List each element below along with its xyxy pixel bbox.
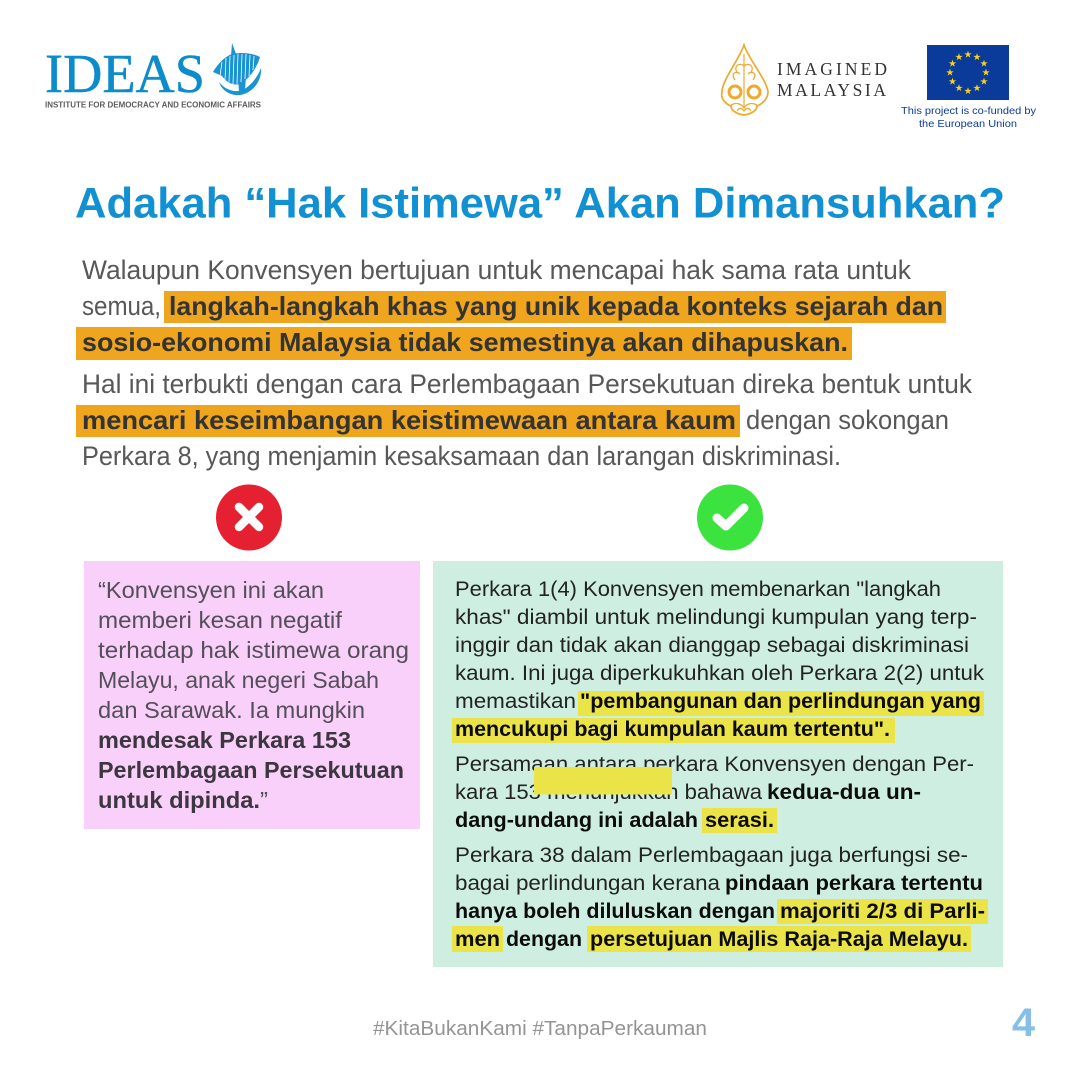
paragraph: Perkara 1(4): Perkara 1(4) Konvensyen membenarkan "langkah — [455, 577, 941, 601]
logo: Imagined Malaysia: MALAYSIA — [777, 80, 886, 100]
paragraph: Perkara 38: hanya boleh diluluskan dengan — [455, 899, 775, 923]
EU credit text: the European Union — [919, 118, 1017, 130]
panel: facts — [433, 561, 1003, 967]
title: Adakah “Hak Istimewa” Akan Dimansuhkan? — [75, 180, 1005, 228]
icon: IDEAS fish emblem — [213, 43, 261, 95]
text block: introduction: sosio-ekonomi Malaysia tidak semestinya akan dihapuskan. — [82, 327, 848, 357]
footer hashtags: #KitaBukanKami #TanpaPerkauman — [373, 1017, 707, 1040]
paragraph: Perkara 38: bagai perlindungan kerana — [455, 871, 720, 895]
logo tagline: INSTITUTE FOR DEMOCRACY AND ECONOMIC AFFAIRS — [45, 100, 262, 110]
icon: wayang leaf — [722, 45, 768, 115]
paragraph: Perkara 153: kara 153 menunjukkan bahawa — [455, 780, 762, 804]
icon: green check — [697, 484, 763, 550]
panel: myth quote: Melayu, anak negeri Sabah — [98, 667, 379, 693]
panel: myth quote: ” — [260, 787, 268, 813]
paragraph: Perkara 153: Persamaan antara perkara Konvensyen dengan Per- — [455, 752, 974, 776]
panel: myth quote: “Konvensyen ini akan — [98, 577, 324, 603]
text block: introduction: mencari keseimbangan keistimewaan antara kaum — [82, 405, 736, 435]
logo wordmark: IDEAS — [45, 43, 205, 104]
logo: EU flag and credit — [901, 45, 1037, 130]
logo: Imagined Malaysia — [722, 45, 887, 115]
EU credit text: This project is co-funded by — [901, 105, 1037, 117]
panel: myth quote: Perlembagaan Persekutuan — [98, 757, 404, 783]
paragraph: Perkara 153 — [455, 752, 974, 832]
panel: myth quote: dan Sarawak. Ia mungkin — [98, 697, 365, 723]
panel: myth quote: untuk dipinda. — [98, 787, 260, 813]
paragraph: Perkara 153: serasi. — [705, 808, 774, 832]
paragraph: Perkara 38: pindaan perkara tertentu — [725, 871, 983, 895]
paragraph: Perkara 38: men — [455, 927, 500, 951]
text block: introduction: Hal ini terbukti dengan cara Perlembagaan Persekutuan direka bentuk untuk — [82, 369, 973, 399]
paragraph: Perkara 38 — [455, 843, 985, 951]
paragraph: Perkara 153: kedua-dua un- — [767, 780, 921, 804]
paragraph: Perkara 1(4) — [455, 577, 984, 741]
text block: introduction: Perkara 8, yang menjamin kesaksamaan dan larangan diskriminasi. — [82, 441, 841, 471]
text block: introduction — [76, 255, 973, 471]
logo text: IMAGINED — [777, 59, 887, 79]
paragraph: Perkara 1(4): khas" diambil untuk melindungi kumpulan yang terp- — [455, 605, 977, 629]
text block: introduction: langkah-langkah khas yang unik kepada konteks sejarah dan — [169, 291, 943, 321]
stray yellow highlight — [534, 767, 672, 794]
panel: myth quote — [84, 561, 420, 829]
paragraph: Perkara 38: Perkara 38 dalam Perlembagaan juga berfungsi se- — [455, 843, 968, 867]
paragraph: Perkara 38: majoriti 2/3 di Parli- — [780, 899, 985, 923]
text block: introduction: Walaupun Konvensyen bertujuan untuk mencapai hak sama rata untuk — [82, 255, 912, 285]
paragraph: Perkara 1(4): kaum. Ini juga diperkukuhkan oleh Perkara 2(2) untuk — [455, 661, 984, 685]
EU credit text — [901, 105, 1037, 130]
paragraph: Perkara 1(4): inggir dan tidak akan dianggap sebagai diskriminasi — [455, 633, 969, 657]
logo: IDEAS — [45, 43, 262, 110]
paragraph: Perkara 1(4): memastikan — [455, 689, 576, 713]
paragraph: Perkara 1(4): mencukupi bagi kumpulan kaum tertentu". — [455, 717, 890, 741]
text block: introduction: semua, — [82, 291, 161, 321]
text block: introduction: dengan sokongan — [746, 405, 949, 435]
page number: 4 — [1012, 1001, 1036, 1045]
EU flag — [927, 45, 1009, 100]
panel: myth quote: memberi kesan negatif — [98, 607, 343, 633]
panel: myth quote: terhadap hak istimewa orang — [98, 637, 409, 663]
paragraph: Perkara 153: dang-undang ini adalah — [455, 808, 698, 832]
icon: red cross — [216, 484, 282, 550]
highlight bars — [76, 291, 946, 437]
panel: myth quote: mendesak Perkara 153 — [98, 727, 351, 753]
highlight bars — [452, 691, 988, 952]
paragraph: Perkara 1(4): "pembangunan dan perlindungan yang — [580, 689, 981, 713]
paragraph: Perkara 38: persetujuan Majlis Raja-Raja Melayu. — [590, 927, 968, 951]
paragraph: Perkara 38: dengan — [506, 927, 582, 951]
